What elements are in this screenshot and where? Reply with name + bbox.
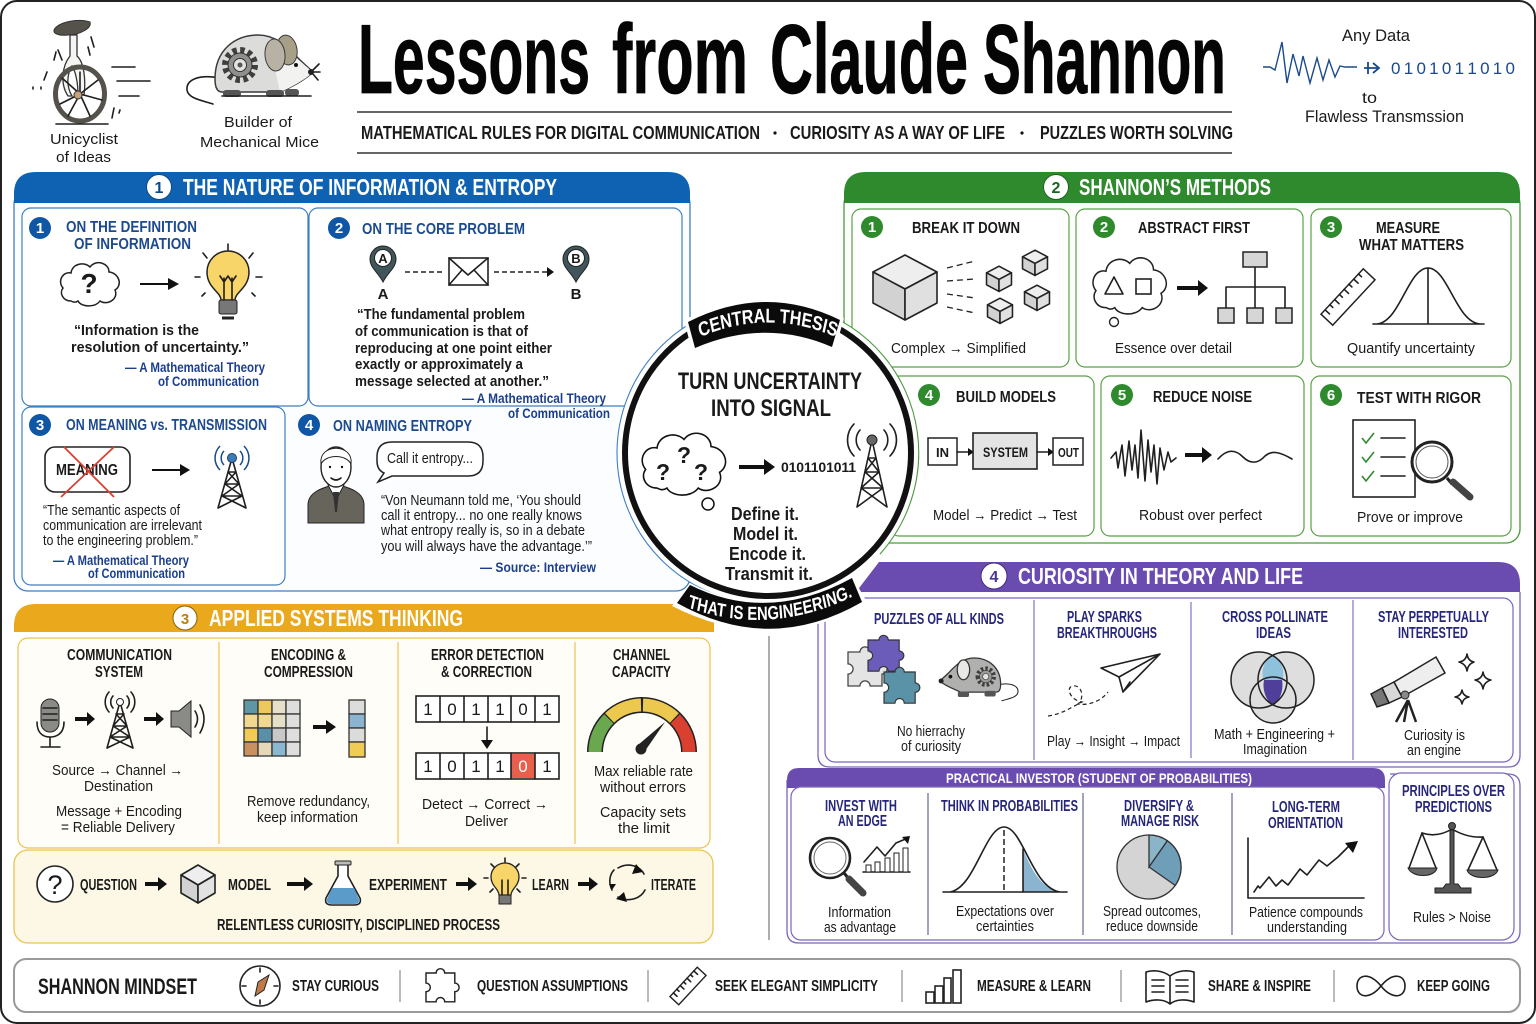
quote: to the engineering problem.” xyxy=(43,532,198,549)
quote: resolution of uncertainty.” xyxy=(71,339,249,356)
icon: thought cloud: ? xyxy=(656,459,670,485)
medallion heading xyxy=(678,368,862,422)
source: — A Mathematical Theory xyxy=(53,552,189,568)
icon: paper plane xyxy=(1048,654,1160,716)
icon: iterate cycle xyxy=(609,864,645,902)
icon: person in suit xyxy=(308,447,364,523)
label: LEARN xyxy=(532,877,569,894)
caption: Complex → Simplified xyxy=(891,340,1026,357)
icon: venn diagram xyxy=(1231,652,1314,723)
icon: light bulb xyxy=(195,244,262,318)
lower panel: question to iterate process xyxy=(14,850,713,943)
text: Detect → Correct → xyxy=(422,796,548,813)
card: build models xyxy=(890,376,1094,536)
icon: tower xyxy=(848,424,896,507)
card: reduce noise: 5 xyxy=(1118,387,1126,404)
panel: section 2 shannon's methods xyxy=(844,172,1520,543)
label: MODEL xyxy=(228,877,271,894)
source: — A Mathematical Theory xyxy=(125,359,265,375)
caption xyxy=(1249,904,1363,936)
card: build models: BUILD MODELS xyxy=(956,389,1056,406)
label: STAY CURIOUS xyxy=(292,978,379,995)
quote: “Information is the xyxy=(74,322,199,339)
icon: light bulb xyxy=(484,858,526,904)
panel: section 1 nature of information and entropy xyxy=(14,172,690,591)
text: without errors xyxy=(599,779,686,796)
header graphic: any data to flawless transmission: 0 1 0 1 0 1 1 0 1 0 xyxy=(1391,59,1515,78)
icon: pin A to envelope to pin B: B xyxy=(571,286,582,303)
column: error detection and correction xyxy=(416,647,559,830)
section 1 header bar: THE NATURE OF INFORMATION & ENTROPY xyxy=(183,174,557,200)
card: on meaning vs transmission: ON MEANING vs. TRANSMISSION xyxy=(66,417,267,434)
panel: section 4 curiosity in theory and life xyxy=(818,562,1520,767)
arrow xyxy=(578,877,598,891)
caption: builder of mechanical mice xyxy=(200,114,319,151)
card: principles over predictions: PREDICTIONS xyxy=(1415,799,1492,816)
bottom banner: that is engineering: THAT IS ENGINEERING. xyxy=(690,588,852,620)
icon: rising line chart xyxy=(1248,838,1364,898)
icon: thought cloud: ? xyxy=(677,442,691,468)
icon: bit rows with corrected bit: 0 xyxy=(447,757,457,776)
text: Remove redundancy, xyxy=(247,793,370,810)
label: MEASURE & LEARN xyxy=(977,978,1091,995)
icon: checklist and magnifier xyxy=(1353,420,1470,497)
card: on the definition of information: ON THE DEFINITION xyxy=(66,219,197,236)
practical investor header: PRACTICAL INVESTOR (STUDENT OF PROBABILITIES) xyxy=(946,770,1252,786)
creed text: Encode it. xyxy=(729,544,806,564)
section 3 header bar: 3 xyxy=(181,611,189,628)
icon: bit rows with corrected bit: 1 xyxy=(423,757,433,776)
caption: Information xyxy=(828,904,891,921)
column: cross pollinate ideas: IDEAS xyxy=(1256,625,1291,642)
section 1 header bar: 1 xyxy=(155,180,164,197)
text: Capacity sets xyxy=(600,804,686,821)
icon: open book xyxy=(1146,971,1194,1004)
icon: bit rows with corrected bit: 1 xyxy=(495,757,505,776)
top banner: central thesis: CENTRAL THESIS xyxy=(698,308,838,336)
text: Max reliable rate xyxy=(594,763,693,780)
column: communication system: SYSTEM xyxy=(95,664,143,681)
caption: No hierrachy xyxy=(897,723,965,740)
column: channel capacity xyxy=(594,647,693,837)
icon: bit rows with corrected bit: 1 xyxy=(471,700,481,719)
card: measure what matters: MEASURE xyxy=(1376,220,1440,237)
icon: microphone tower speaker xyxy=(37,692,204,748)
card: on meaning vs transmission: 3 xyxy=(36,417,44,434)
card: on naming entropy xyxy=(298,414,596,575)
header graphic: any data to flawless transmission: Any Data xyxy=(1342,26,1411,45)
title: from xyxy=(612,4,748,114)
card: on naming entropy: ON NAMING ENTROPY xyxy=(333,418,472,435)
label: SEEK ELEGANT SIMPLICITY xyxy=(715,978,878,995)
caption: reduce downside xyxy=(1106,918,1198,935)
caption: unicyclist of ideas xyxy=(50,131,119,166)
creed text: Define it. xyxy=(731,504,799,524)
icon: ruler xyxy=(670,967,706,1005)
caption: builder of mechanical mice: Mechanical Mice xyxy=(200,134,319,151)
icon: bit rows with corrected bit: 1 xyxy=(542,757,552,776)
quote: of communication is that of xyxy=(355,323,529,340)
icon: puzzle pieces xyxy=(848,635,920,703)
creed text xyxy=(725,504,813,584)
card: measure what matters xyxy=(1311,209,1511,367)
column: channel capacity: CAPACITY xyxy=(612,664,671,681)
card: measure what matters: 3 xyxy=(1327,219,1335,236)
card: test with rigor xyxy=(1311,376,1511,536)
caption xyxy=(824,904,896,936)
quote: communication are irrelevant xyxy=(43,517,203,534)
source: of Communication xyxy=(88,565,185,581)
icon: compass xyxy=(240,966,280,1006)
caption xyxy=(897,723,965,755)
quote: message selected at another.” xyxy=(355,373,549,390)
quote: call it entropy... no one really knows xyxy=(381,507,582,524)
column: invest with an edge: INVEST WITH xyxy=(825,798,897,815)
text xyxy=(422,796,548,830)
caption: Prove or improve xyxy=(1357,509,1463,526)
source: card 2 attribution over medallion edge: of Communication xyxy=(508,405,610,421)
quote xyxy=(380,492,592,555)
icon: flask xyxy=(326,861,360,905)
upper panel: four system columns xyxy=(18,638,710,848)
quote xyxy=(355,306,552,390)
card: principles over predictions: Rules > Noise xyxy=(1413,909,1491,926)
column: think in probabilities: THINK IN PROBABILITIES xyxy=(941,798,1078,815)
caption: of curiosity xyxy=(901,738,961,755)
column: long-term orientation: ORIENTATION xyxy=(1268,815,1343,832)
medallion heading: TURN UNCERTAINTY xyxy=(678,368,862,395)
icon: pin A to envelope to pin B xyxy=(370,246,589,303)
card: break it down xyxy=(852,209,1069,367)
caption: Imagination xyxy=(1243,741,1307,758)
column: cross pollinate ideas: CROSS POLLINATE xyxy=(1222,609,1328,626)
source: card 2 attribution over medallion edge: — A Mathematical Theory xyxy=(462,390,606,406)
column: encoding and compression: ENCODING & xyxy=(271,647,346,664)
icon: capacity gauge xyxy=(595,705,689,754)
caption xyxy=(1404,727,1465,759)
source xyxy=(125,359,265,389)
text: Source → Channel → xyxy=(52,762,183,779)
card: abstract first: 2 xyxy=(1100,219,1108,236)
icon: bell curve with shaded tail xyxy=(943,827,1067,892)
column: puzzles of all kinds: PUZZLES OF ALL KINDS xyxy=(874,611,1004,628)
text xyxy=(247,793,370,826)
text: = Reliable Delivery xyxy=(61,819,175,836)
label: EXPERIMENT xyxy=(369,877,447,894)
source: card 2 attribution over medallion edge xyxy=(462,390,610,421)
icon: data grid compression xyxy=(244,700,365,757)
subtitle strip: CURIOSITY AS A WAY OF LIFE xyxy=(790,123,1005,143)
caption: an engine xyxy=(1407,742,1461,759)
icon: noise to smooth wave xyxy=(1111,430,1292,484)
card: on the core problem: 2 xyxy=(335,220,343,237)
arrow xyxy=(140,278,179,290)
caption: unicyclist of ideas: Unicyclist xyxy=(50,131,119,148)
card: abstract first: ABSTRACT FIRST xyxy=(1138,220,1250,237)
caption: unicyclist of ideas: of Ideas xyxy=(56,149,111,166)
subtitle strip: MATHEMATICAL RULES FOR DIGITAL COMMUNICATION xyxy=(361,123,760,143)
header icon: mechanical mouse xyxy=(187,33,320,104)
title: Lessons xyxy=(358,4,590,114)
arrow xyxy=(145,877,167,891)
icon: pin A to envelope to pin B: A xyxy=(378,251,388,266)
subtitle strip xyxy=(357,112,1233,153)
card: on the core problem: ON THE CORE PROBLEM xyxy=(362,221,525,238)
label: QUESTION ASSUMPTIONS xyxy=(477,978,628,995)
binary: 0101101011 xyxy=(781,459,856,475)
text: Message + Encoding xyxy=(56,803,182,820)
column: diversify and manage risk: MANAGE RISK xyxy=(1121,813,1199,830)
arrow xyxy=(152,464,190,476)
caption xyxy=(1103,903,1201,935)
column: stay perpetually interested: STAY PERPETUALLY xyxy=(1378,609,1489,626)
icon: magnifier and growth chart xyxy=(810,836,910,893)
quote xyxy=(71,322,249,356)
quote: “Von Neumann told me, ‘You should xyxy=(381,492,581,509)
card: on the core problem xyxy=(309,208,682,406)
quote xyxy=(43,502,203,549)
dividers xyxy=(1034,600,1353,760)
icon: question xyxy=(37,866,73,902)
quote: reproducing at one point either xyxy=(355,340,552,357)
section 4 header bar: CURIOSITY IN THEORY AND LIFE xyxy=(1018,563,1303,589)
card: on naming entropy: 4 xyxy=(305,417,314,434)
card: reduce noise: REDUCE NOISE xyxy=(1153,389,1252,406)
icon: bars xyxy=(926,970,961,1003)
tagline: RELENTLESS CURIOSITY, DISCIPLINED PROCESS xyxy=(217,917,500,934)
text: Destination xyxy=(84,778,153,795)
caption: Essence over detail xyxy=(1115,340,1232,357)
arrow xyxy=(739,459,775,475)
panel: practical investor xyxy=(787,768,1520,943)
icon: big cube into small cubes xyxy=(873,250,1049,323)
icon: bit rows with corrected bit: 0 xyxy=(518,700,528,719)
source: of Communication xyxy=(158,373,259,389)
icon: cloud question xyxy=(61,263,119,306)
card: on the definition of information: 1 xyxy=(36,220,44,237)
column: think in probabilities xyxy=(941,798,1078,935)
section 3 header bar xyxy=(14,604,714,632)
column: long-term orientation: LONG-TERM xyxy=(1272,799,1340,816)
icon: puzzle piece xyxy=(426,969,459,1002)
icon: in system out: OUT xyxy=(1058,445,1079,460)
column: stay perpetually interested xyxy=(1371,609,1491,759)
column: diversify and manage risk: DIVERSIFY & xyxy=(1124,798,1194,815)
icon: crossed out meaning: MEANING xyxy=(56,462,118,479)
icon: in system out: SYSTEM xyxy=(983,444,1028,460)
column: puzzles of all kinds xyxy=(848,611,1018,755)
card: measure what matters: WHAT MATTERS xyxy=(1359,237,1464,254)
icon: cloud shapes to hierarchy xyxy=(1093,252,1292,326)
practical investor inner frame xyxy=(791,787,1384,940)
caption: Play → Insight → Impact xyxy=(1047,733,1181,750)
caption xyxy=(1214,726,1335,758)
caption: Spread outcomes, xyxy=(1103,903,1201,920)
column: error detection and correction: ERROR DETECTION xyxy=(431,647,544,664)
icon: model cube xyxy=(181,865,215,903)
caption xyxy=(956,903,1054,935)
text: keep information xyxy=(257,809,358,826)
card: on the definition of information: OF INFORMATION xyxy=(74,236,191,253)
icon: ruler and bell curve xyxy=(1321,268,1484,325)
text xyxy=(594,763,693,837)
icon: thought cloud xyxy=(642,433,726,510)
speech bubble xyxy=(377,442,483,482)
icon: crossed out meaning xyxy=(45,447,130,497)
quote: exactly or approximately a xyxy=(355,356,524,373)
quote: “The fundamental problem xyxy=(357,306,525,323)
icon: in system out xyxy=(928,433,1083,469)
section 2 header bar: 2 xyxy=(1052,180,1061,197)
central thesis medallion xyxy=(616,302,920,629)
quote: what entropy really is, so in a debate xyxy=(380,522,585,539)
quote: you will always have the advantage.’” xyxy=(381,538,592,555)
header icon: unicycle xyxy=(33,20,150,124)
caption: Model → Predict → Test xyxy=(933,507,1078,524)
caption: Patience compounds xyxy=(1249,904,1363,921)
label: QUESTION xyxy=(80,877,137,894)
icon: bit rows with corrected bit: 1 xyxy=(471,757,481,776)
caption: Quantify uncertainty xyxy=(1347,340,1475,357)
section 2 header bar xyxy=(844,172,1520,203)
column: communication system xyxy=(37,647,204,836)
column: error detection and correction: & CORRECTION xyxy=(441,664,532,681)
icon: transmission tower xyxy=(215,446,249,508)
source: — Source: Interview xyxy=(480,559,596,575)
caption: Expectations over xyxy=(956,903,1054,920)
section 3 header bar: APPLIED SYSTEMS THINKING xyxy=(209,605,463,631)
icon: bit rows with corrected bit: 1 xyxy=(542,700,552,719)
dividers xyxy=(928,793,1232,935)
speech bubble: Call it entropy... xyxy=(387,450,473,467)
practical investor header xyxy=(787,768,1385,788)
card: on meaning vs transmission xyxy=(22,407,285,585)
section 2 header bar: SHANNON’S METHODS xyxy=(1079,174,1271,200)
column: play sparks breakthroughs xyxy=(1047,609,1181,750)
card: test with rigor: 6 xyxy=(1327,387,1335,404)
icon: question: ? xyxy=(47,870,63,900)
icon: bit rows with corrected bit: 0 xyxy=(447,700,457,719)
card: test with rigor: TEST WITH RIGOR xyxy=(1357,390,1481,407)
column: play sparks breakthroughs: PLAY SPARKS xyxy=(1067,609,1142,626)
header graphic: any data to flawless transmission xyxy=(1263,26,1515,126)
column: diversify and manage risk xyxy=(1103,798,1201,935)
label: SHARE & INSPIRE xyxy=(1208,978,1311,995)
card: break it down: 1 xyxy=(868,219,876,236)
caption: as advantage xyxy=(824,919,896,936)
title: Shannon xyxy=(983,4,1226,114)
section 1 header bar xyxy=(14,172,690,203)
text: the limit xyxy=(618,820,671,837)
icon: infinity xyxy=(1357,976,1405,996)
text xyxy=(52,762,183,836)
column: cross pollinate ideas xyxy=(1214,609,1335,758)
column: long-term orientation xyxy=(1248,799,1364,936)
header graphic: any data to flawless transmission: Flawless Transmssion xyxy=(1305,107,1464,126)
icon: pin A to envelope to pin B: A xyxy=(378,286,389,303)
column: channel capacity: CHANNEL xyxy=(613,647,670,664)
icon: pin A to envelope to pin B: B xyxy=(571,251,581,266)
icon: thought cloud: ? xyxy=(694,459,708,485)
column: invest with an edge: AN EDGE xyxy=(838,813,887,830)
medallion heading: INTO SIGNAL xyxy=(711,395,831,422)
title: Claude xyxy=(770,4,968,114)
icon: balance scale xyxy=(1408,822,1498,893)
column: encoding and compression: COMPRESSION xyxy=(264,664,353,681)
arrow xyxy=(456,877,477,891)
column: invest with an edge xyxy=(810,798,910,936)
footer title: SHANNON MINDSET xyxy=(38,974,197,999)
icon: bit rows with corrected bit: 0 xyxy=(518,757,528,776)
card: build models: 4 xyxy=(925,387,934,404)
footer: shannon mindset xyxy=(14,959,1520,1012)
caption: Robust over perfect xyxy=(1139,507,1263,524)
header graphic: any data to flawless transmission: to xyxy=(1362,90,1377,107)
label: ITERATE xyxy=(651,877,696,894)
subtitle strip: PUZZLES WORTH SOLVING xyxy=(1040,123,1233,143)
icon: telescope and stars xyxy=(1371,654,1491,722)
panel: section 3 applied systems thinking xyxy=(14,604,714,943)
caption: builder of mechanical mice: Builder of xyxy=(224,114,293,131)
section 4 header bar: 4 xyxy=(990,569,999,586)
column: play sparks breakthroughs: BREAKTHROUGHS xyxy=(1057,625,1157,642)
icon: mechanical mouse xyxy=(939,658,1018,701)
card: break it down: BREAK IT DOWN xyxy=(912,220,1020,237)
card: abstract first xyxy=(1076,209,1303,367)
text: Deliver xyxy=(465,813,508,830)
source xyxy=(53,552,189,581)
icon: bit rows with corrected bit: 1 xyxy=(495,700,505,719)
icon: pie chart xyxy=(1117,835,1181,899)
icon: bit rows with corrected bit: 1 xyxy=(423,700,433,719)
card frames xyxy=(825,598,1513,762)
icon: in system out: IN xyxy=(936,445,949,460)
caption: certainties xyxy=(976,918,1034,935)
creed text: Model it. xyxy=(733,524,798,544)
creed text: Transmit it. xyxy=(725,564,813,584)
column: stay perpetually interested: INTERESTED xyxy=(1398,625,1468,642)
section 4 header bar xyxy=(856,562,1520,592)
quote: “The semantic aspects of xyxy=(43,502,181,519)
column: communication system: COMMUNICATION xyxy=(67,647,172,664)
arrow xyxy=(287,877,313,891)
card: on the definition of information xyxy=(22,208,308,406)
center divider line xyxy=(768,636,770,940)
caption: understanding xyxy=(1267,919,1347,936)
caption: Math + Engineering + xyxy=(1214,726,1335,743)
label: KEEP GOING xyxy=(1417,978,1490,995)
card: reduce noise xyxy=(1101,376,1304,536)
caption: Curiosity is xyxy=(1404,727,1465,744)
icon: bit rows with corrected bit xyxy=(416,696,559,779)
icon: cloud question: ? xyxy=(80,268,98,299)
column: encoding and compression xyxy=(244,647,370,826)
card: principles over predictions xyxy=(1389,773,1514,940)
